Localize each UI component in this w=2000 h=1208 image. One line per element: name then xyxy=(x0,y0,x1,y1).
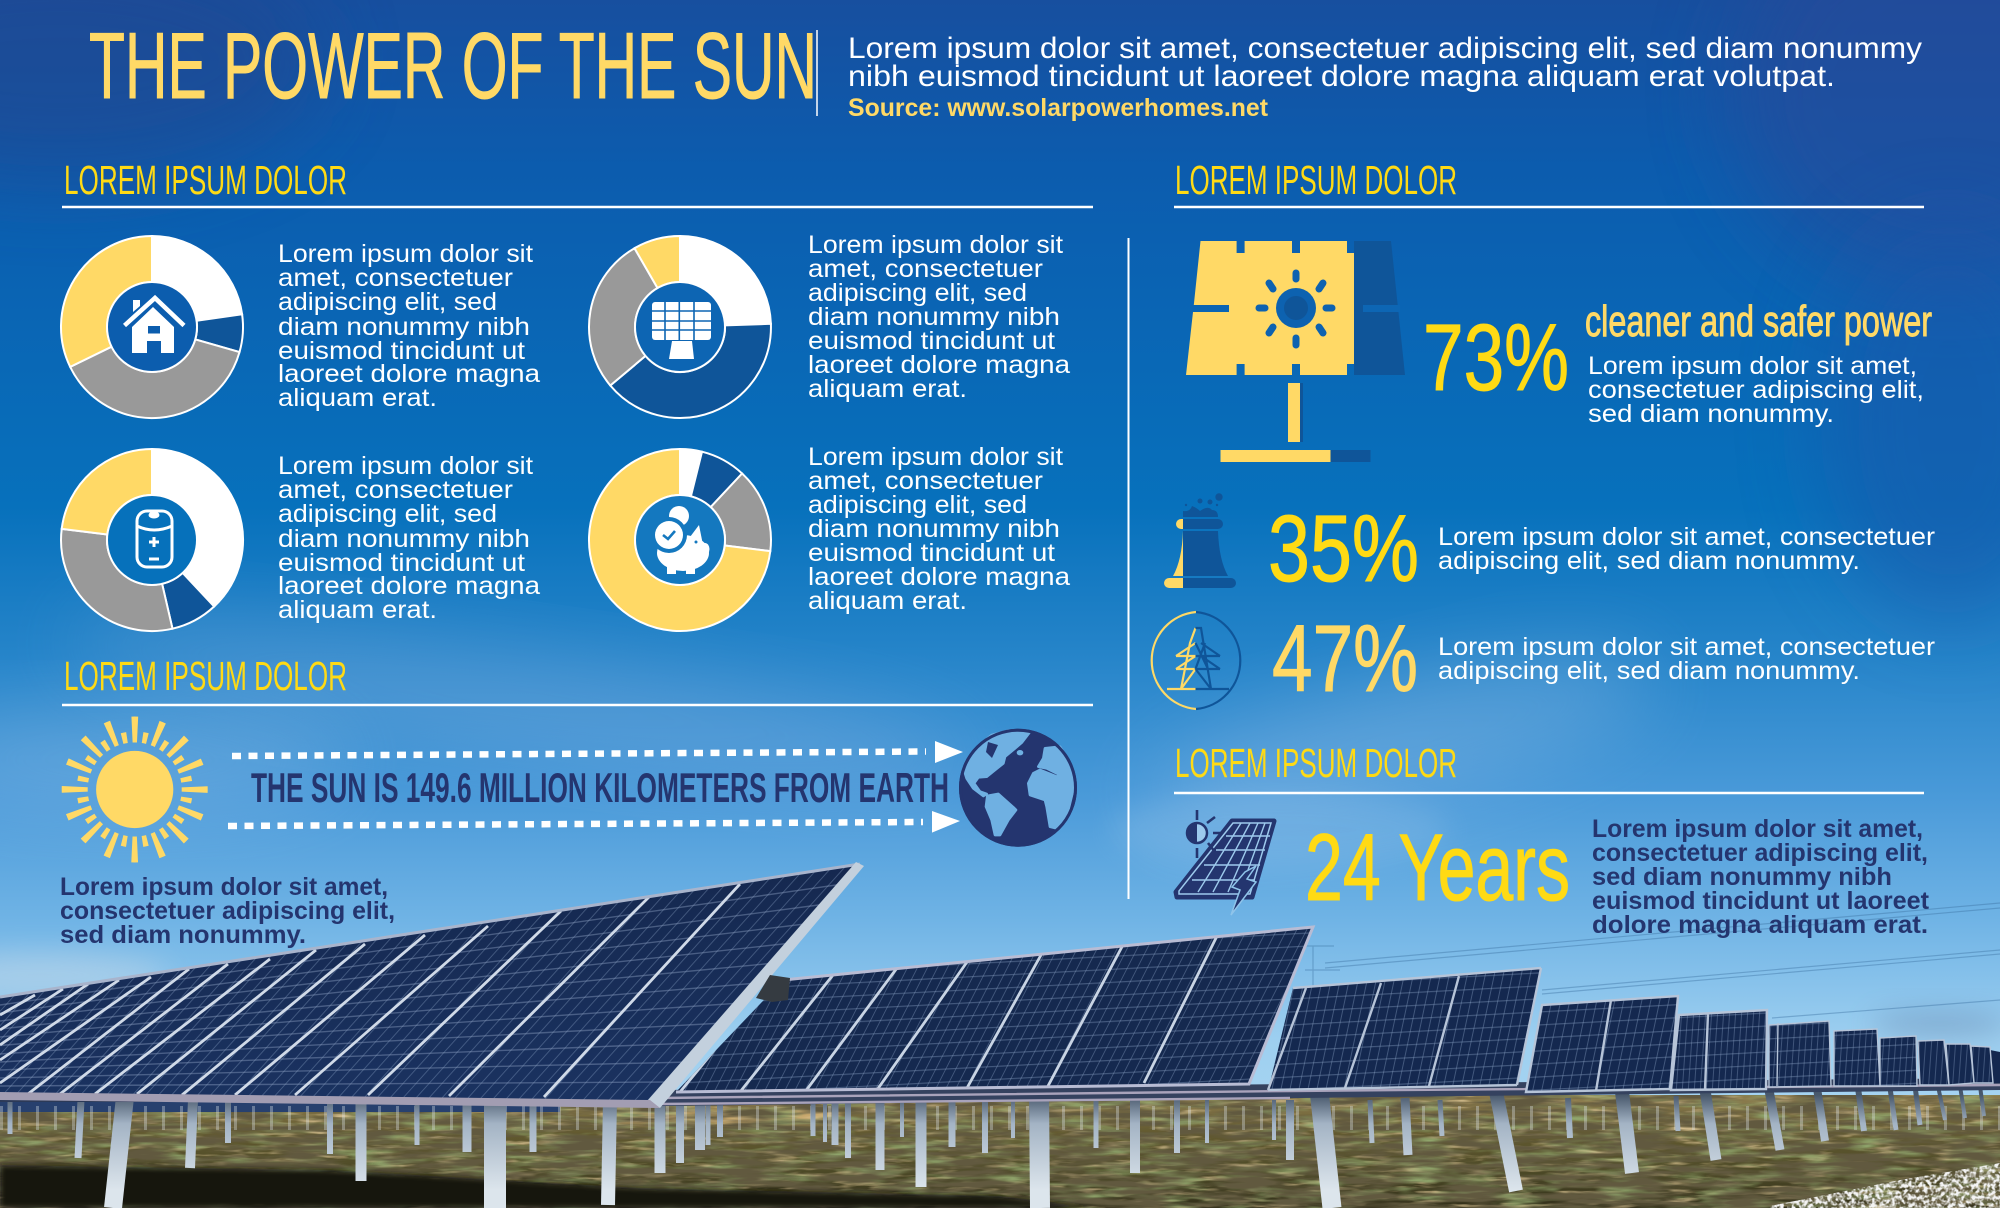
icon: earth globe xyxy=(959,729,1077,847)
text: 47% detail: adipiscing elit, sed diam nonummy. xyxy=(1438,657,1860,685)
stat: 35%: 35% xyxy=(1268,496,1419,602)
text: distance note: sed diam nonummy. xyxy=(60,921,306,949)
text: battery donut: laoreet dolore magna xyxy=(278,572,540,600)
text: battery donut: aliquam erat. xyxy=(278,596,437,624)
distance statement: THE SUN IS 149.6 MILLION KILOMETERS FROM EARTH xyxy=(251,764,949,811)
donut: savings xyxy=(589,449,771,631)
text: 47% detail xyxy=(1438,633,1935,685)
icon: sun xyxy=(73,728,196,851)
text: battery donut: adipiscing elit, sed xyxy=(278,500,497,528)
text: battery donut xyxy=(278,452,540,624)
text: savings donut xyxy=(808,443,1070,615)
text: 35% detail xyxy=(1438,523,1935,575)
header intro text: Source: www.solarpowerhomes.net xyxy=(848,94,1269,122)
text: lifespan detail: Lorem ipsum dolor sit amet, xyxy=(1592,815,1923,843)
header intro text xyxy=(848,32,1922,122)
second panel row xyxy=(660,920,1320,1100)
stat: 24 Years: 24 Years xyxy=(1305,815,1570,921)
header intro text: nibh euismod tincidunt ut laoreet dolore magna aliquam erat volutpat. xyxy=(848,60,1835,93)
icon: panel grid xyxy=(652,302,711,359)
text: distance note: consectetuer adipiscing elit, xyxy=(60,897,395,925)
text: home donut: euismod tincidunt ut xyxy=(278,337,525,365)
text: panel donut: adipiscing elit, sed xyxy=(808,279,1027,307)
text: battery donut: Lorem ipsum dolor sit xyxy=(278,452,533,480)
text: distance note xyxy=(60,873,395,949)
header intro text: Lorem ipsum dolor sit amet, consectetuer adipiscing elit, sed diam nonummy xyxy=(848,32,1922,65)
text: lifespan detail: sed diam nonummy nibh xyxy=(1592,863,1892,891)
text: savings donut: amet, consectetuer xyxy=(808,467,1043,495)
icon: solar panel with sun xyxy=(1186,241,1405,462)
text: 73% detail xyxy=(1588,352,1924,428)
section heading: top left: LOREM IPSUM DOLOR xyxy=(64,157,347,203)
text: lifespan detail xyxy=(1592,815,1930,939)
donut: battery xyxy=(61,449,243,631)
text: lifespan detail: dolore magna aliquam erat. xyxy=(1592,911,1928,939)
text: 73% detail: sed diam nonummy. xyxy=(1588,400,1834,428)
stat: 73%: 73% xyxy=(1423,305,1569,411)
icon: power pylon xyxy=(1152,612,1240,709)
far panels xyxy=(1268,968,2000,1092)
text: savings donut: diam nonummy nibh xyxy=(808,515,1060,543)
icon: piggy bank xyxy=(651,506,710,574)
icon: house xyxy=(124,298,184,353)
column divider xyxy=(1128,238,1130,899)
text: panel donut: aliquam erat. xyxy=(808,375,967,403)
text: panel donut xyxy=(808,231,1070,403)
donut: solar panel xyxy=(589,236,771,418)
text: home donut: adipiscing elit, sed xyxy=(278,288,497,316)
text: battery donut: diam nonummy nibh xyxy=(278,525,530,553)
text: battery donut: euismod tincidunt ut xyxy=(278,549,525,577)
arrow: bottom dotted xyxy=(228,811,960,833)
icon: cooling tower xyxy=(1164,493,1236,588)
text: lifespan detail: consectetuer adipiscing elit, xyxy=(1592,839,1928,867)
text: savings donut: laoreet dolore magna xyxy=(808,563,1070,591)
icon: solar panel with bolt xyxy=(1176,810,1274,915)
text: savings donut: aliquam erat. xyxy=(808,587,967,615)
text: savings donut: adipiscing elit, sed xyxy=(808,491,1027,519)
text: distance note: Lorem ipsum dolor sit amet, xyxy=(60,873,388,901)
icon: battery xyxy=(137,511,172,567)
section heading: lifespan: LOREM IPSUM DOLOR xyxy=(1175,740,1457,786)
section heading: top right: LOREM IPSUM DOLOR xyxy=(1175,157,1457,203)
text: 73% detail: Lorem ipsum dolor sit amet, xyxy=(1588,352,1917,380)
main large solar panel xyxy=(0,860,870,1108)
text: home donut: diam nonummy nibh xyxy=(278,313,530,341)
title: THE POWER OF THE SUN xyxy=(89,13,817,118)
text: panel donut: diam nonummy nibh xyxy=(808,303,1060,331)
section heading: distance: LOREM IPSUM DOLOR xyxy=(64,653,347,699)
text: home donut xyxy=(278,240,540,412)
text: panel donut: amet, consectetuer xyxy=(808,255,1043,283)
text: home donut: aliquam erat. xyxy=(278,384,437,412)
title divider xyxy=(816,30,818,116)
text: savings donut: Lorem ipsum dolor sit xyxy=(808,443,1063,471)
donut: home xyxy=(61,236,243,418)
text: home donut: laoreet dolore magna xyxy=(278,360,540,388)
text: panel donut: euismod tincidunt ut xyxy=(808,327,1055,355)
text: lifespan detail: euismod tincidunt ut laoreet xyxy=(1592,887,1930,915)
text: panel donut: laoreet dolore magna xyxy=(808,351,1070,379)
text: 35% detail: Lorem ipsum dolor sit amet, consectetuer xyxy=(1438,523,1935,551)
text: home donut: Lorem ipsum dolor sit xyxy=(278,240,533,268)
text: home donut: amet, consectetuer xyxy=(278,264,513,292)
text: 73% detail: consectetuer adipiscing elit, xyxy=(1588,376,1924,404)
stat: 47%: 47% xyxy=(1272,606,1418,712)
text: battery donut: amet, consectetuer xyxy=(278,476,513,504)
text: 35% detail: adipiscing elit, sed diam nonummy. xyxy=(1438,547,1860,575)
text: panel donut: Lorem ipsum dolor sit xyxy=(808,231,1063,259)
text: savings donut: euismod tincidunt ut xyxy=(808,539,1055,567)
arrow: top dotted xyxy=(232,741,963,763)
text: 47% detail: Lorem ipsum dolor sit amet, consectetuer xyxy=(1438,633,1935,661)
